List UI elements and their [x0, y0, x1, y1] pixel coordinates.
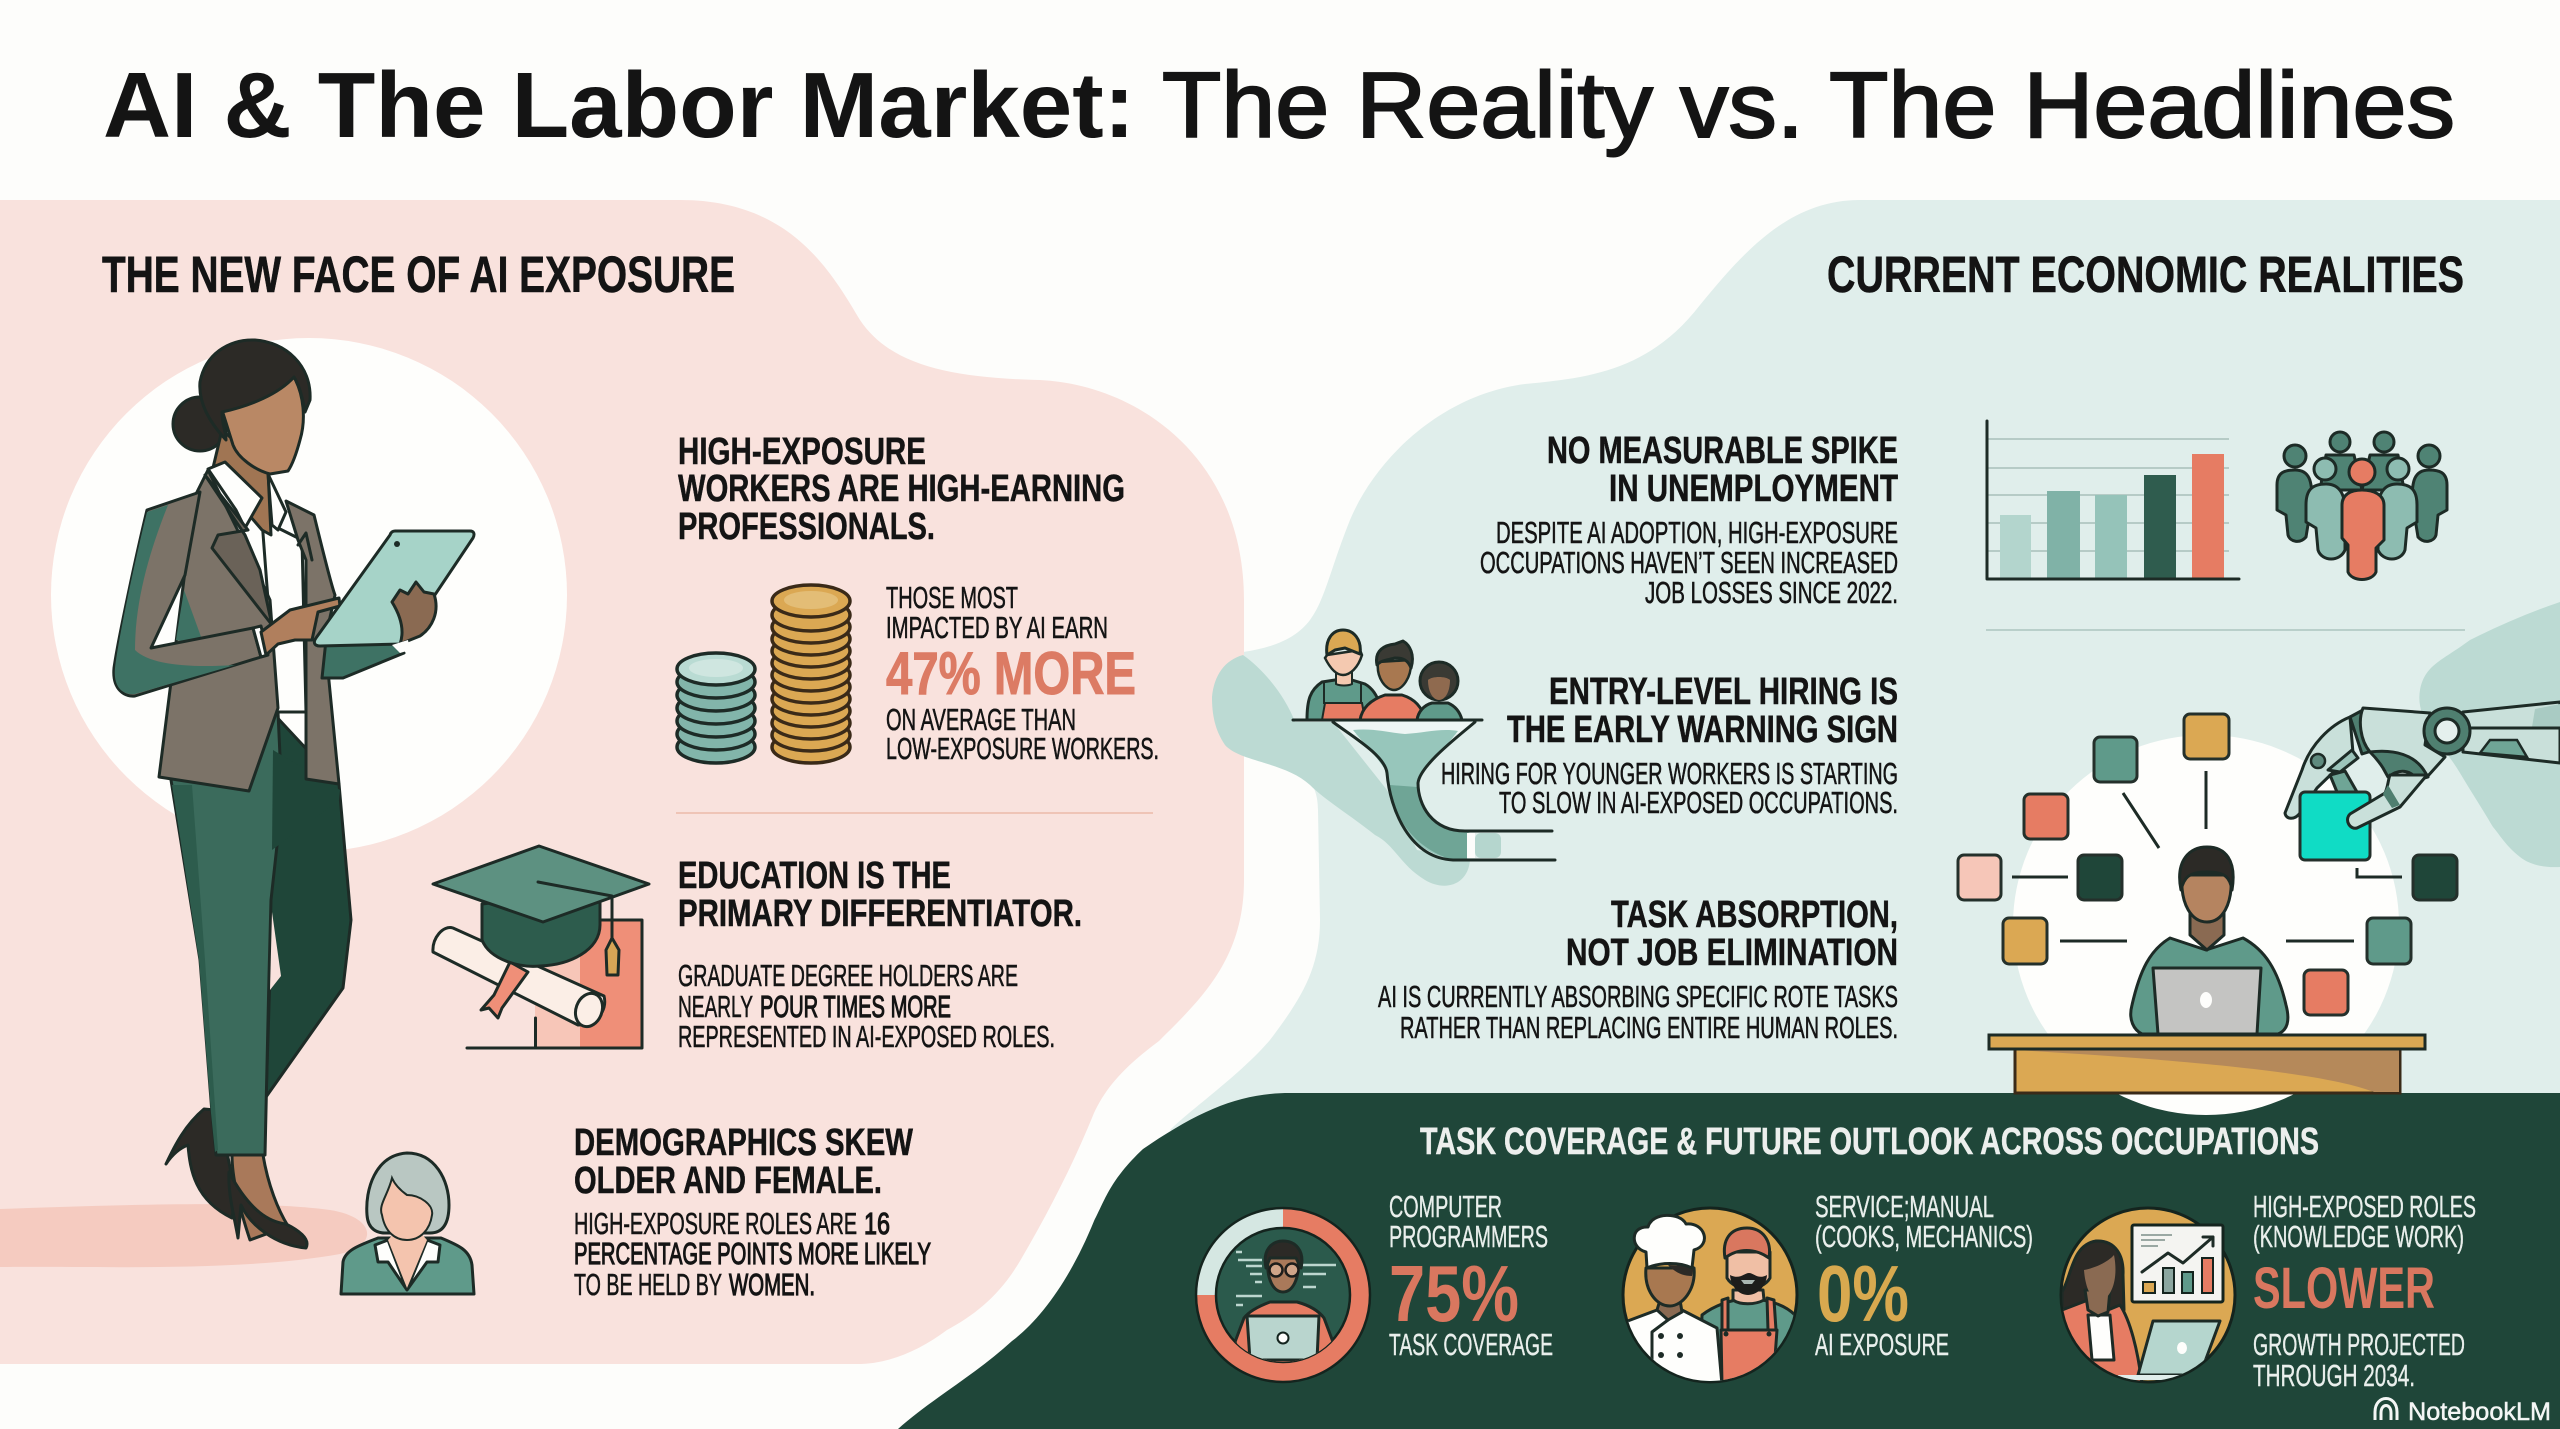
text block: task absorption: TASK ABSORPTION, — [1611, 894, 1898, 936]
chef face — [1646, 1268, 1694, 1306]
icon: white circle behind professional woman — [51, 338, 567, 852]
text block: entry-level hiring — [1441, 671, 1898, 820]
text block: education: NEARLY — [678, 989, 753, 1024]
text block: task absorption: NOT JOB ELIMINATION — [1566, 932, 1898, 974]
stat block: service and manual — [1815, 1189, 2033, 1362]
tablet — [314, 531, 474, 646]
fingers — [2285, 717, 2353, 818]
stat block: computer programmers: 75% — [1389, 1249, 1519, 1338]
right sleeve — [322, 640, 404, 678]
logo: NotebookLM: NotebookLM — [2408, 1398, 2551, 1426]
text block: education: PRIMARY DIFFERENTIATOR. — [678, 893, 1082, 935]
laptop — [2138, 1321, 2220, 1375]
text block: entry-level hiring: HIRING FOR YOUNGER WORKERS IS STARTING — [1441, 756, 1898, 791]
stat block: service and manual: (COOKS, MECHANICS) — [1815, 1219, 2033, 1254]
text block: demographics: 16 — [864, 1206, 890, 1241]
text block: education: POUR TIMES MORE — [760, 989, 951, 1024]
text block: no measurable spike: DESPITE AI ADOPTION, HIGH-EXPOSURE — [1496, 515, 1898, 550]
gap between legs — [270, 912, 281, 990]
text block: 47% more: THOSE MOST — [886, 580, 1018, 615]
back row — [2277, 432, 2447, 541]
neck and face — [2085, 1290, 2110, 1316]
shirt — [1235, 1302, 1333, 1370]
text block: education: REPRESENTED IN AI-EXPOSED ROLES. — [678, 1019, 1055, 1054]
text block: demographics: DEMOGRAPHICS SKEW — [574, 1122, 913, 1164]
wrist ring — [2424, 708, 2470, 754]
mechanic cap — [1724, 1228, 1770, 1258]
text block: demographics: WOMEN. — [729, 1267, 815, 1302]
text block: education — [678, 855, 1082, 1054]
jacket — [2062, 1300, 2142, 1385]
back leg — [266, 712, 351, 1097]
title: AI & The Labor Market: — [103, 53, 1135, 157]
icon: knowledge worker with growth chart — [2061, 1208, 2235, 1385]
text block: no measurable spike: NO MEASURABLE SPIKE — [1547, 430, 1898, 472]
text block: 47% more: LOW-EXPOSURE WORKERS. — [886, 731, 1159, 766]
face — [222, 377, 303, 474]
text block: task absorption — [1378, 894, 1898, 1045]
stat block: computer programmers: PROGRAMMERS — [1389, 1219, 1548, 1254]
icon: coin stacks — [677, 585, 850, 763]
robot arm — [2285, 702, 2560, 860]
bar chart — [1987, 421, 2239, 579]
back shoe — [166, 1109, 234, 1218]
text block: 47% more: ON AVERAGE THAN — [886, 702, 1076, 737]
text block: high-exposure heading: PROFESSIONALS. — [678, 506, 935, 548]
cap base — [482, 890, 600, 966]
palm — [2350, 710, 2375, 754]
title — [103, 53, 2455, 157]
shirt — [262, 520, 306, 712]
text block: high-exposure heading: HIGH-EXPOSURE — [678, 431, 926, 473]
text block: 47% more — [886, 580, 1159, 766]
desk — [1989, 1035, 2425, 1093]
stat block: service and manual: 0% — [1817, 1249, 1909, 1338]
thumb — [2348, 775, 2427, 828]
text block: high-exposure heading: WORKERS ARE HIGH-EARNING — [678, 468, 1125, 510]
text block: no measurable spike: OCCUPATIONS HAVEN’T SEEN INCREASED — [1480, 545, 1898, 580]
icon: graduation cap and diploma — [433, 846, 649, 1048]
stat block: high-exposed roles: THROUGH 2034. — [2253, 1358, 2415, 1393]
watercolor blob at right edge — [2419, 602, 2560, 867]
front ankle — [232, 1155, 288, 1240]
illustration: worker at desk with task tiles and robot hand — [1958, 702, 2560, 1115]
pointing hand — [261, 598, 340, 655]
white circle behind worker — [2013, 735, 2399, 1115]
title: The Reality vs. The Headlines — [1162, 53, 2455, 157]
laptop — [1247, 1316, 1319, 1360]
glasses — [1270, 1264, 1298, 1276]
cuff — [253, 626, 268, 657]
text block: high-exposure heading — [678, 431, 1125, 548]
stat block: service and manual: AI EXPOSURE — [1815, 1327, 1949, 1362]
heading: the new face of AI exposure: THE NEW FACE OF AI EXPOSURE — [102, 246, 735, 303]
panel: dark green footer background — [898, 1093, 2560, 1429]
text block: no measurable spike: JOB LOSSES SINCE 2022. — [1645, 575, 1898, 610]
text block: entry-level hiring: ENTRY-LEVEL HIRING IS — [1549, 671, 1898, 713]
icon: computer programmer ring — [1196, 1208, 1370, 1382]
gold coin stack — [772, 585, 850, 763]
text block: no measurable spike: IN UNEMPLOYMENT — [1609, 468, 1898, 510]
icon: group of people — [2277, 432, 2447, 580]
panel: mint background — [1170, 200, 2560, 1200]
text block: task absorption: AI IS CURRENTLY ABSORBING SPECIFIC ROTE TASKS — [1378, 979, 1898, 1014]
stat block: computer programmers — [1389, 1189, 1553, 1362]
worker — [2131, 847, 2288, 1034]
front shoe — [229, 1172, 307, 1248]
face — [1268, 1258, 1298, 1292]
lapels — [205, 475, 272, 625]
connector lines — [2012, 771, 2402, 941]
icon: older woman bust — [341, 1153, 474, 1294]
hair bun — [173, 397, 227, 451]
person 3 — [1417, 662, 1462, 720]
left arm — [114, 492, 261, 696]
task tile held by robot — [2300, 792, 2370, 860]
text block: 47% more: IMPACTED BY AI EARN — [886, 610, 1108, 645]
stat block: service and manual: SERVICE;MANUAL — [1815, 1189, 1994, 1224]
text block: education: GRADUATE DEGREE HOLDERS ARE — [678, 958, 1018, 993]
text block: demographics: HIGH-EXPOSURE ROLES ARE — [574, 1206, 857, 1241]
front leg — [171, 712, 282, 1155]
front person in coral — [2342, 459, 2384, 580]
mortarboard — [433, 846, 649, 922]
jacket right side — [286, 501, 339, 784]
task tiles — [1958, 714, 2457, 1015]
tassel — [606, 938, 619, 975]
mechanic body — [1700, 1299, 1794, 1381]
scroll — [433, 928, 605, 1025]
text block: demographics: TO BE HELD BY — [574, 1267, 722, 1302]
stat block: high-exposed roles — [2253, 1189, 2476, 1393]
stat block: computer programmers: COMPUTER — [1389, 1189, 1502, 1224]
neck — [212, 430, 271, 535]
text block: demographics — [574, 1122, 931, 1302]
jacket body — [159, 470, 278, 791]
floor shadow — [0, 1204, 367, 1267]
hair — [1265, 1241, 1302, 1268]
stat block: high-exposed roles: SLOWER — [2253, 1256, 2435, 1321]
text block: no measurable spike — [1480, 430, 1898, 610]
code lines — [1236, 1252, 1336, 1305]
text block: entry-level hiring: TO SLOW IN AI-EXPOSED OCCUPATIONS. — [1499, 785, 1898, 820]
hair — [2062, 1241, 2124, 1315]
chef body — [1625, 1310, 1722, 1385]
holding hand — [392, 582, 436, 644]
chef hat — [1634, 1215, 1704, 1268]
panel: pink background — [0, 200, 1244, 1364]
text block: entry-level hiring: THE EARLY WARNING SIGN — [1507, 709, 1898, 751]
text block: education: EDUCATION IS THE — [678, 855, 951, 897]
text block: demographics: PERCENTAGE POINTS MORE LIKELY — [574, 1236, 931, 1271]
middle row — [2306, 458, 2417, 559]
growth chart board — [2132, 1225, 2223, 1302]
stat block: computer programmers: TASK COVERAGE — [1389, 1327, 1553, 1362]
watercolor blob behind hiring funnel — [1212, 655, 1470, 886]
hair — [200, 340, 310, 440]
text block: demographics: OLDER AND FEMALE. — [574, 1160, 882, 1202]
text block: task absorption: RATHER THAN REPLACING ENTIRE HUMAN ROLES. — [1400, 1010, 1898, 1045]
funnel fill — [1333, 722, 1475, 734]
teal coin stack — [677, 653, 755, 763]
funnel outline — [1293, 720, 1555, 860]
mechanic face — [1727, 1252, 1770, 1288]
icon: chef and mechanic — [1623, 1208, 1800, 1385]
illustration: professional woman with tablet — [114, 340, 474, 1248]
stat: 47% more: 47% MORE — [886, 640, 1136, 707]
icon: hiring funnel with young workers — [1293, 630, 1555, 860]
ribbon — [481, 962, 528, 1018]
person 1 — [1307, 630, 1380, 720]
person 2 — [1360, 641, 1425, 720]
